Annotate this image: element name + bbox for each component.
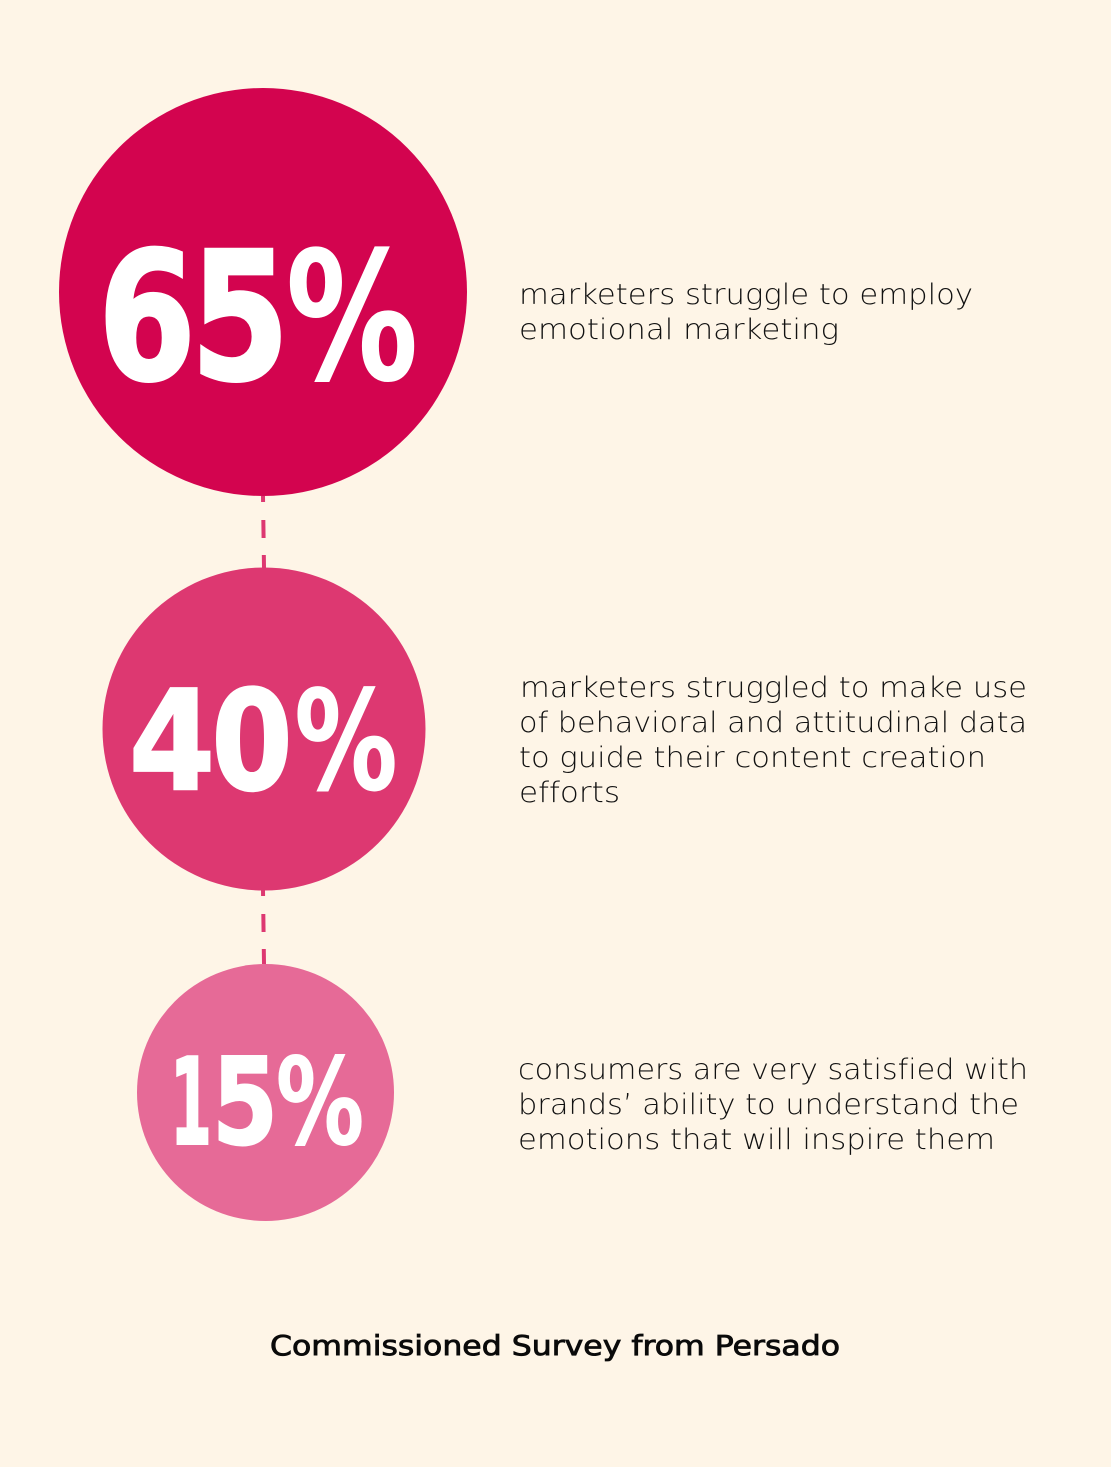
text: 40% description	[519, 671, 1027, 809]
text: 15% description: consumers are very satisfied with	[518, 1053, 1028, 1086]
circle: 40%: 4	[129, 661, 215, 822]
text: 15% description: emotions that will inspire them	[518, 1123, 995, 1156]
circle: 40%: 0	[212, 661, 292, 822]
circle: 65%: 6	[98, 214, 196, 421]
circle: 15%: 1	[170, 1034, 212, 1173]
circle: 15%: %	[276, 1034, 364, 1173]
circle: 65%: %	[286, 214, 418, 421]
circle: 40%: %	[294, 661, 398, 822]
circle: 65%	[59, 88, 467, 496]
circle: 65%: 5	[190, 214, 290, 421]
text: 65% description: emotional marketing	[519, 313, 839, 346]
circle: 40%	[102, 568, 426, 890]
circle: 15%	[137, 964, 394, 1221]
text: 65% description: marketers struggle to employ	[519, 278, 973, 311]
text: 40% description: efforts	[519, 776, 620, 809]
text: 65% description	[519, 278, 973, 346]
text: 40% description: of behavioral and attitudinal data	[519, 706, 1027, 739]
text: 40% description: to guide their content creation	[519, 741, 986, 774]
source credit: Commissioned Survey from Persado	[270, 1330, 840, 1362]
text: 15% description: brands’ ability to understand the	[518, 1088, 1019, 1121]
connector: 40% to 15%	[263, 890, 264, 964]
text: 40% description: marketers struggled to make use	[520, 671, 1027, 704]
connector: 65% to 40%	[263, 496, 264, 568]
circle: 15%: 5	[212, 1034, 278, 1173]
text: 15% description	[518, 1053, 1028, 1156]
